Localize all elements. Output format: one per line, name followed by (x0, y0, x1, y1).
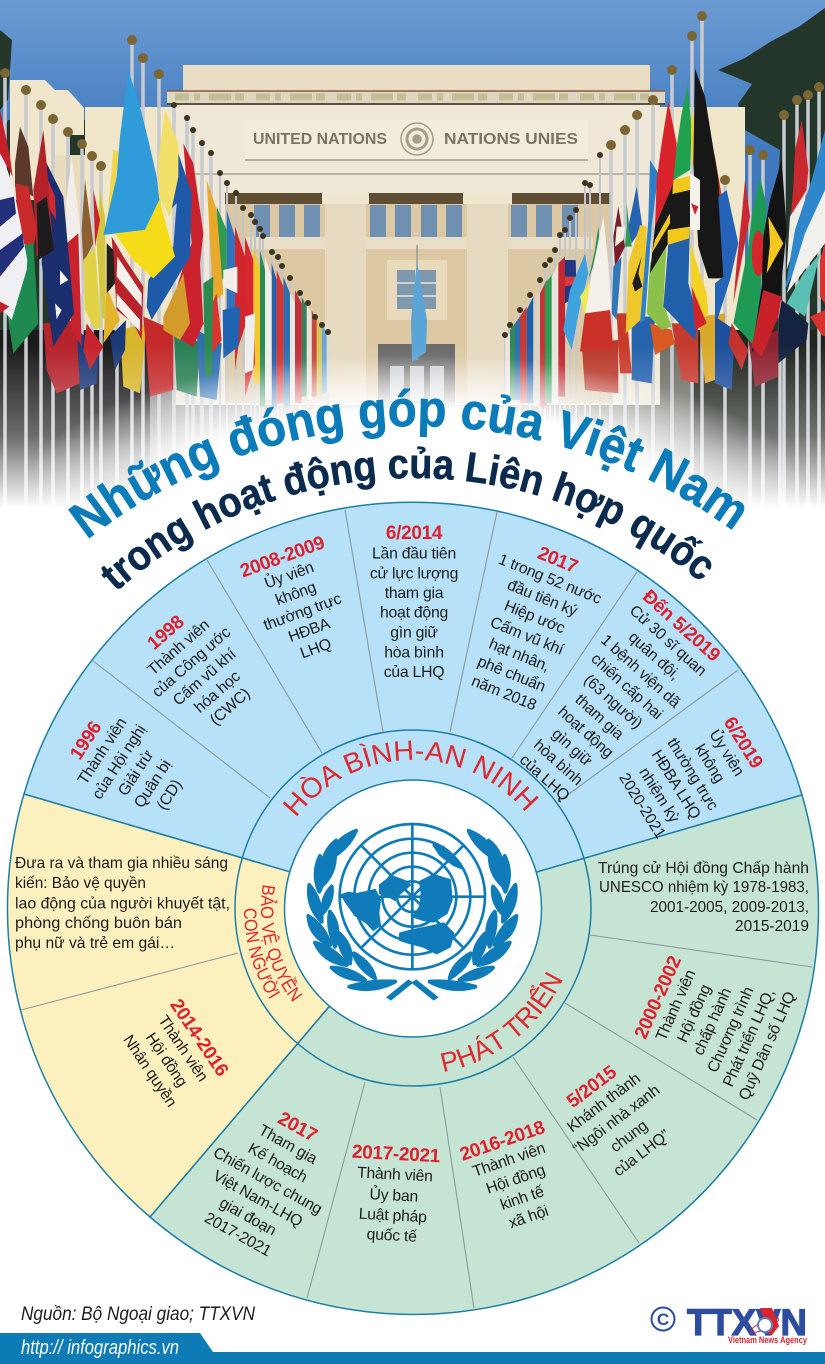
text: 2008-2009: Ủy viên (262, 557, 316, 592)
title (68, 388, 744, 589)
text: 2016-2018 (457, 1117, 573, 1240)
text: 1996: của Hội nghị (89, 722, 150, 803)
text: 2017 UN plan: Tham gia (256, 1122, 320, 1168)
text: 2016-2018: Hội đồng (484, 1162, 547, 1198)
text: up to 5/2019: hòa bình (530, 737, 586, 789)
text: 2008-2009: không (273, 579, 318, 609)
text: 2017 UN plan: 2017-2021 (201, 1210, 274, 1260)
text: up to 5/2019: (63 người) (580, 672, 645, 732)
text: up to 5/2019 (501, 585, 726, 818)
title line 1: Những đóng góp của Việt Nam (68, 388, 744, 538)
main building (167, 65, 665, 406)
text: 2017 nuclear treaty: hạt nhân, (486, 636, 552, 675)
text: 1998: Cấm vũ khí (170, 645, 240, 709)
text: 2017 nuclear treaty: Cấm vũ khí (488, 614, 567, 659)
text: 1996 (54, 700, 200, 835)
text: 1996: Giải trừ (115, 747, 157, 799)
text: 2008-2009: LHQ (298, 636, 334, 662)
text: 2000-2002: chấp hành (690, 986, 735, 1058)
text: 6/2014: tham gia (385, 585, 444, 602)
text: 2000-2002: Quỹ Dân số LHQ (736, 989, 799, 1103)
ring label: human rights: BẢO VỆ QUYỀN (260, 885, 302, 1002)
text: 6/2014: Lần đầu tiên (372, 546, 456, 562)
text: 6/2014: cử lực lượng (370, 566, 458, 582)
text: UNESCO: UNESCO nhiệm kỳ 1978-1983, (599, 879, 809, 896)
text: 1996: 1996 (66, 718, 106, 764)
building lettering: UNITED NATIONS (253, 131, 387, 148)
text: 2000-2002: Chương trình (705, 985, 757, 1075)
text: 2000-2002 (625, 940, 799, 1103)
center white disc (284, 780, 542, 1037)
text: 2017 nuclear treaty: Hiệp ước (502, 598, 567, 637)
text: 2016-2018: 2016-2018 (457, 1117, 548, 1166)
text: UNESCO: 2001-2005, 2009-2013, (650, 899, 809, 916)
door (378, 344, 455, 406)
text: human rights initiatives: kiến: Bảo vệ quyền (15, 875, 146, 892)
text: 2008-2009: HĐBA (286, 615, 333, 646)
text: 6/2019: nhiệm kỳ (635, 765, 682, 826)
main building: NATIONS UNIES (444, 131, 578, 148)
circular diagram (6, 502, 820, 1316)
text: 1998: Thành viên (145, 617, 213, 679)
text: 2000-2002: Hội đồng (674, 982, 715, 1045)
right flags (505, 68, 825, 407)
website url: http:// infographics.vn (21, 1337, 179, 1359)
text: 2016-2018: Thành viên (470, 1140, 548, 1181)
text: up to 5/2019: Đến 5/2019 (638, 586, 724, 666)
text: 2017 nuclear treaty: 2017 (534, 543, 580, 578)
ring label: peace and security: HÒA BÌNH-AN NINH (282, 740, 538, 816)
ring label: human rights (244, 885, 302, 1002)
text: up to 5/2019: gìn giữ (548, 725, 595, 770)
text: 6/2019: không (691, 741, 728, 786)
center flag (416, 245, 418, 360)
text: 2014-2016: 2014-2016 (165, 995, 232, 1080)
text: 5/2015: 5/2015 (563, 1061, 621, 1113)
text: human rights initiatives (15, 855, 230, 952)
left flags (0, 70, 331, 407)
text: human rights initiatives: phụ nữ và trẻ em gái… (15, 935, 175, 952)
text: 2014-2016 (118, 995, 232, 1112)
text: 2017 UN plan: 2017 (274, 1108, 320, 1146)
text: 6/2014: hoạt động (380, 604, 448, 622)
text: 1996: (CD) (154, 777, 186, 813)
dark lower band (0, 330, 825, 507)
text: up to 5/2019: quân đội, (625, 629, 683, 684)
text: 2017-2021: Luật pháp (358, 1206, 428, 1226)
text: 1998 (122, 593, 273, 746)
text: 6/2014: hòa bình (384, 644, 444, 662)
icon: TTXVN logo: C (657, 1310, 669, 1329)
text: 1996: Thành viên (75, 715, 130, 788)
text: 1998: (CWC) (207, 685, 254, 729)
text: 2016-2018: xã hội (507, 1203, 551, 1232)
finials (5, 16, 819, 335)
inner ring outline (235, 730, 591, 1086)
text: 2017 nuclear treaty (450, 530, 612, 722)
text: 2008-2009 (237, 532, 360, 672)
text: 2017 nuclear treaty: 1 trong 52 nước (496, 551, 604, 608)
text: up to 5/2019: 1 bệnh viện dã (597, 632, 683, 712)
text: 2014-2016: Hội đồng (142, 1030, 190, 1090)
panel: development sector (150, 795, 819, 1314)
text: 6/2019: 6/2019 (719, 713, 767, 772)
trees (0, 8, 825, 330)
text: 2000-2002: Thành viên (653, 968, 699, 1044)
text: up to 5/2019: Cử 30 sĩ quan (626, 602, 709, 680)
text: UNESCO: Trúng cử Hội đồng Chấp hành (598, 860, 809, 877)
text: 6/2014 (370, 523, 458, 681)
ring label: human rights: CON NGƯỜI (244, 908, 280, 999)
text: 2017 nuclear treaty: đầu tiên ký (505, 577, 580, 620)
text: up to 5/2019: chiến cấp hai (587, 650, 666, 723)
side buildings (10, 80, 745, 340)
text: 6/2014: gìn giữ (390, 624, 438, 642)
panel: human rights sector (7, 794, 413, 1217)
text: UNESCO (598, 860, 809, 935)
text: 2017 UN plan: Chiến lược chung (210, 1144, 325, 1218)
text: 6/2019: Ủy viên (705, 726, 749, 779)
footer bar (0, 1333, 825, 1364)
text: 2017-2021: quốc tế (366, 1226, 418, 1246)
header photo: Palais des Nations with flags (0, 0, 825, 504)
text: up to 5/2019: tham gia (572, 691, 627, 743)
text: 1996: Quân bị (131, 757, 175, 811)
text: 6/2014: của LHQ (384, 664, 444, 681)
text: human rights initiatives: phòng chống buôn bán (15, 915, 182, 932)
text: 5/2015: chung (607, 1117, 651, 1156)
text: human rights initiatives: Đưa ra và tham gia nhiều sáng (15, 855, 228, 872)
text: up to 5/2019: hoạt động (554, 703, 616, 761)
text: 2017 UN plan: Việt Nam-LHQ (210, 1167, 305, 1231)
text: 2014-2016: Thành viên (154, 1013, 211, 1085)
ring label: development: PHÁT TRIỂN (440, 972, 562, 1072)
text: up to 5/2019: của LHQ (516, 751, 572, 805)
text: 2017 nuclear treaty: năm 2018 (469, 673, 539, 714)
text: 6/2019: 2020-2021 (615, 770, 669, 842)
text: 2017 UN plan: Kế hoạch (245, 1140, 310, 1186)
text: 2000-2002: 2000-2002 (631, 953, 686, 1042)
text: 2017 nuclear treaty: phê chuẩn (475, 652, 548, 696)
panel: peace and security sector (24, 502, 802, 908)
title line 2: trong hoạt động của Liên hợp quốc (101, 446, 712, 589)
text: 2017 UN plan: giai đoạn (216, 1195, 279, 1239)
text: 1998: 1998 (144, 612, 188, 655)
text: 6/2019: HĐBA LHQ (648, 747, 704, 822)
icon: TTXVN logo: Vietnam News Agency (728, 1335, 807, 1345)
text: 2017 UN plan (180, 1089, 355, 1272)
text: 6/2019: thường trực (663, 735, 721, 814)
text: 2008-2009: thường trực (261, 590, 344, 634)
text: 1998: của Công ước (149, 624, 234, 701)
text: 5/2015: của LHQ” (611, 1127, 673, 1180)
Ukraine flag (103, 70, 159, 235)
text: 2017-2021 (347, 1142, 441, 1247)
text: human rights initiatives: lao động của người khuyết tật, (15, 896, 230, 912)
text: 6/2019 (613, 703, 773, 845)
text: 2017-2021: Ủy ban (369, 1184, 419, 1206)
text: 2000-2002: Phát triển LHQ, (719, 986, 778, 1090)
text: 5/2015: Khánh thành (564, 1070, 644, 1136)
icon: TTXVN logo: TTXVN (687, 1302, 807, 1343)
text: 2014-2016: Nhân quyền (119, 1032, 180, 1110)
photo fade to white (0, 354, 825, 507)
text: 6/2014: 6/2014 (386, 523, 443, 544)
poles (5, 16, 819, 507)
columns (322, 193, 512, 404)
text: 5/2015 (544, 1048, 688, 1191)
text: 5/2015: “Ngôi nhà xanh (570, 1082, 663, 1158)
source note: Nguồn: Bộ Ngoại giao; TTXVN (21, 1304, 255, 1325)
text: 2017-2021: Thành viên (357, 1165, 433, 1185)
text: UNESCO: 2015-2019 (735, 918, 809, 935)
text: 2017-2021: 2017-2021 (351, 1142, 441, 1167)
text: 2008-2009: 2008-2009 (237, 532, 328, 582)
text: 2016-2018: kinh tế (498, 1183, 547, 1214)
windows (254, 205, 578, 237)
text: 1998: hóa học (191, 668, 244, 717)
icon: UN emblem (308, 823, 516, 1001)
